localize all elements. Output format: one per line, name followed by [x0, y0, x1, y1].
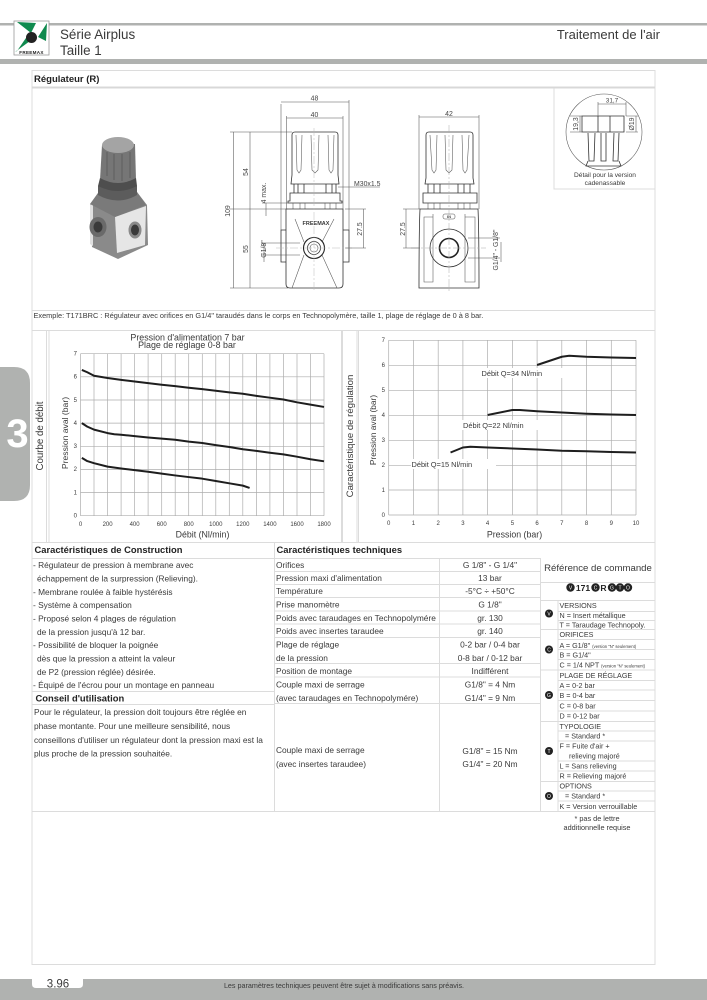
technical table: Couple maxi de serrage: [276, 745, 365, 755]
construction list: [33, 560, 214, 690]
usage advice text: conseillons d'utiliser un régulateur dont la pression maxi est la: [34, 735, 263, 745]
front view dimensions: 27.5: [357, 222, 364, 236]
chart: flow curve: 1600: [290, 522, 304, 528]
order code: R: [600, 583, 607, 593]
chart: regulation curve: 1: [382, 488, 386, 494]
chart: regulation curve: 6: [535, 521, 539, 527]
construction list: - Système à compensation: [33, 600, 132, 610]
chart: flow curve: 400: [130, 522, 140, 528]
order options table: C: [547, 648, 551, 654]
chart: regulation curve: 9: [610, 521, 614, 527]
footnote: additionnelle requise: [564, 823, 630, 832]
chart: regulation curve: 0: [387, 521, 391, 527]
order options table: A = G1/8" (version "N" seulement): [560, 641, 637, 650]
order options table: K = Version verrouillable: [560, 802, 637, 811]
chart: regulation curve: Pression (bar): [487, 530, 542, 540]
page number: 3.96: [47, 978, 69, 990]
order options table: ORIFICES: [560, 630, 594, 639]
chart: regulation curve: Pression aval (bar): [368, 395, 378, 465]
construction list: dès que la pression a atteint la valeur: [37, 654, 175, 664]
order code: C: [594, 586, 598, 592]
front view dimensions: 55: [243, 245, 250, 253]
order code: [540, 582, 655, 600]
technical table: Couple maxi de serrage: [276, 680, 365, 690]
technical table: Plage de réglage: [276, 640, 339, 650]
order reference heading: Référence de commande: [544, 563, 652, 574]
front view dimensions: M30x1.5: [354, 181, 381, 188]
technical table: Orifices: [276, 560, 304, 570]
chart: regulation curve: 4: [486, 521, 490, 527]
chart: regulation curve: 2: [437, 521, 441, 527]
construction list: échappement de la surpression (Relieving).: [37, 574, 198, 584]
footnote: [564, 814, 630, 832]
side view dimensions: 42: [445, 111, 453, 118]
order options table: G: [547, 693, 551, 699]
chart: regulation curve: 5: [382, 388, 386, 394]
detail box: padlock version: 19,3: [573, 117, 580, 131]
side view dimensions: G1/4" - G1/8": [493, 229, 500, 270]
construction list: de la pression jusqu'à 12 bar.: [37, 627, 145, 637]
technical table: G1/4" = 20 Nm: [462, 759, 518, 769]
order options table: T: [547, 749, 551, 755]
chart: regulation curve: 1: [412, 521, 416, 527]
front view dimensions: 40: [311, 112, 318, 119]
order options table: C = 1/4 NPT (version "N" seulement): [560, 660, 646, 670]
chart: flow curve: 800: [184, 522, 194, 528]
technical table: G 1/8": [478, 600, 502, 610]
chart: flow curve: Plage de réglage 0-8 bar: [138, 340, 236, 350]
technical table: Position de montage: [276, 666, 352, 676]
chart: flow curve: 1200: [236, 522, 250, 528]
chart: flow curve: 0: [74, 514, 78, 520]
chart: regulation curve: [368, 338, 640, 540]
detail box: padlock version: 31,7: [606, 98, 619, 104]
order options table: F = Fuite d'air +: [560, 742, 610, 750]
construction list: - Régulateur de pression à membrane avec: [33, 560, 193, 570]
order options table: V: [547, 612, 551, 618]
logo: [14, 21, 49, 55]
detail box: padlock version: [554, 88, 655, 189]
chart: flow curve: 0: [79, 522, 83, 528]
header title: [60, 27, 135, 58]
technical table: Indifférent: [472, 666, 509, 676]
chart: flow curve: 6: [74, 375, 78, 381]
order options table: = Standard *: [565, 792, 605, 800]
order code: T: [618, 586, 622, 592]
chart: flow curve: 1: [74, 490, 78, 496]
order options table: B = 0-4 bar: [560, 691, 596, 700]
order options table: = Standard *: [565, 732, 605, 740]
chart: regulation curve: 0: [382, 513, 386, 519]
technical table: Poids avec insertes taraudee: [276, 626, 384, 636]
chart: flow curve: [60, 332, 331, 540]
order options table: A = 0-2 bar: [560, 681, 595, 690]
footer note: Les paramètres techniques peuvent être sujet à modifications sans préavis.: [224, 981, 464, 990]
order options table: L = Sans relieving: [560, 762, 617, 770]
table grid: [32, 542, 540, 812]
order options table: TYPOLOGIE: [560, 722, 601, 731]
front view dimensions: 4 max.: [261, 183, 268, 203]
technical table: G1/8" = 15 Nm: [462, 746, 518, 756]
chart: flow curve: 200: [103, 522, 113, 528]
chart: flow curve: 3: [74, 444, 78, 450]
construction list: - Proposé selon 4 plages de régulation: [33, 614, 176, 624]
chart: flow curve: Pression d'alimentation 7 bar: [130, 332, 245, 342]
footer band: [0, 979, 707, 1000]
technical table: gr. 140: [477, 626, 503, 636]
side tab: chapter 3: [0, 367, 30, 501]
logo: FREEMAX: [19, 50, 44, 55]
side view dimensions: 27.5: [400, 222, 407, 236]
chart: regulation curve: 6: [382, 363, 386, 369]
construction list: - Membrane roulée à faible hystérésis: [33, 587, 173, 597]
detail box: padlock version: Détail pour la version: [574, 172, 636, 179]
chart: flow curve: 4: [74, 421, 78, 427]
construction list: - Possibilité de bloquer la poignée: [33, 640, 159, 650]
front view dimensions: 54: [243, 168, 250, 176]
usage advice text: plus proche de la pression souhaitée.: [34, 748, 172, 758]
order options table: [540, 600, 655, 965]
chart: regulation curve: 3: [382, 438, 386, 444]
front view dimensions: [225, 96, 381, 288]
order options table: C = 0-8 bar: [560, 702, 596, 710]
panel title: Régulateur (R): [34, 74, 99, 85]
order code: V: [569, 586, 573, 592]
order code: O: [626, 586, 630, 592]
side view dimensions: [400, 111, 501, 270]
technical table: G1/8" = 4 Nm: [465, 680, 515, 690]
chart: regulation curve: 10: [633, 521, 640, 527]
technical table: 0-8 bar / 0-12 bar: [458, 653, 522, 663]
drawing: front view: [276, 128, 352, 292]
order options table: T = Taraudage Technopoly.: [560, 620, 645, 630]
construction heading: Caractéristiques de Construction: [34, 544, 183, 555]
front view dimensions: 48: [311, 96, 318, 102]
technical table: 0-2 bar / 0-4 bar: [460, 640, 520, 650]
chart heading: flow curve: Courbe de débit: [35, 401, 46, 470]
footnote: * pas de lettre: [574, 814, 620, 823]
technical table: de la pression: [276, 653, 328, 663]
drawing: side view: IN: [447, 214, 451, 219]
technical table: Température: [276, 586, 323, 596]
chart: flow curve: Pression aval (bar): [60, 397, 70, 469]
chart: flow curve: 1000: [209, 522, 223, 528]
order options table: N = Insert métallique: [560, 611, 626, 620]
order options table: PLAGE DE RÉGLAGE: [560, 671, 632, 680]
technical table: G1/4" = 9 Nm: [465, 693, 515, 703]
header title: Taille 1: [60, 43, 102, 58]
detail box: padlock version: cadenassable: [585, 180, 626, 187]
front view dimensions: 109: [225, 205, 232, 217]
chart: regulation curve: Débit Q=34 Nl/min: [482, 369, 542, 378]
order options table: D = 0-12 bar: [560, 712, 600, 720]
usage advice heading: Conseil d'utilisation: [36, 692, 124, 704]
chart: flow curve: 5: [74, 398, 78, 404]
header section name: Traitement de l'air: [557, 27, 661, 42]
technical table: (avec taraudages en Technopolymére): [276, 693, 418, 703]
order options table: VERSIONS: [560, 601, 597, 610]
chart: regulation curve: 2: [382, 463, 386, 469]
product photo: [90, 137, 148, 259]
technical table: G 1/8" - G 1/4": [463, 560, 517, 570]
chart: flow curve: Débit (Nl/min): [176, 530, 229, 540]
technical table: Poids avec taraudages en Technopolymére: [276, 613, 436, 623]
side tab: chapter 3: 3: [6, 412, 29, 456]
order code: 171: [576, 583, 590, 593]
order options table: OPTIONS: [560, 782, 592, 790]
usage advice text: phase montante. Pour une meilleure sensibilité, nous: [34, 721, 230, 731]
order options table: O: [547, 794, 551, 800]
chart: regulation curve: 5: [511, 521, 515, 527]
chart: flow curve: 1400: [263, 522, 277, 528]
construction list: - Équipé de l'écrou pour un montage en panneau: [33, 680, 214, 690]
usage advice text: [34, 707, 263, 758]
chart: flow curve: 600: [157, 522, 167, 528]
chart: regulation curve: 7: [560, 521, 564, 527]
main panel frame: [32, 70, 655, 964]
chart: regulation curve: 3: [461, 521, 465, 527]
header bars: [0, 23, 707, 64]
example caption: Exemple: T171BRC : Régulateur avec orifices en G1/4" taraudés dans le corps en Technopolymère, taille 1, plage de réglage de 0 à 8 bar.: [34, 311, 483, 320]
detail box: padlock version: Ø19: [629, 117, 636, 131]
order options table: B = G1/4": [560, 650, 591, 660]
chart: regulation curve: 4: [382, 413, 386, 419]
chart heading: regulation: Caractéristique de régulation: [345, 375, 356, 497]
order options table: relieving majoré: [569, 752, 620, 760]
chart: flow curve: 2: [74, 467, 78, 473]
chart: regulation curve: 7: [382, 338, 386, 344]
chart: regulation curve: Débit Q=15 Nl/min: [412, 460, 472, 469]
front view dimensions: G1/8": [261, 240, 268, 258]
chart: regulation curve: Débit Q=22 Nl/min: [463, 421, 524, 430]
construction list: de P2 (pression réglée) désirée.: [37, 667, 156, 677]
chart: flow curve: 7: [74, 352, 78, 358]
technical table: [276, 560, 522, 769]
chart frames: [46, 331, 358, 542]
drawing: side view: [411, 125, 486, 292]
header title: Série Airplus: [60, 27, 135, 42]
technical table: -5°C ÷ +50°C: [465, 586, 515, 596]
technical table: gr. 130: [477, 613, 503, 623]
technical table: Prise manomètre: [276, 600, 340, 610]
usage advice text: Pour le régulateur, la pression doit toujours être réglée en: [34, 707, 247, 717]
drawing: front view: FREEMAX: [303, 221, 330, 227]
order code: G: [610, 586, 614, 592]
order options table: R = Relieving majoré: [560, 772, 626, 780]
technical table: (avec insertes taraudee): [276, 759, 366, 769]
chart: flow curve: 1800: [317, 522, 331, 528]
technical table: 13 bar: [478, 573, 502, 583]
technical heading: Caractéristiques techniques: [276, 544, 402, 555]
technical table: Pression maxi d'alimentation: [276, 573, 382, 583]
chart: regulation curve: 8: [585, 521, 589, 527]
